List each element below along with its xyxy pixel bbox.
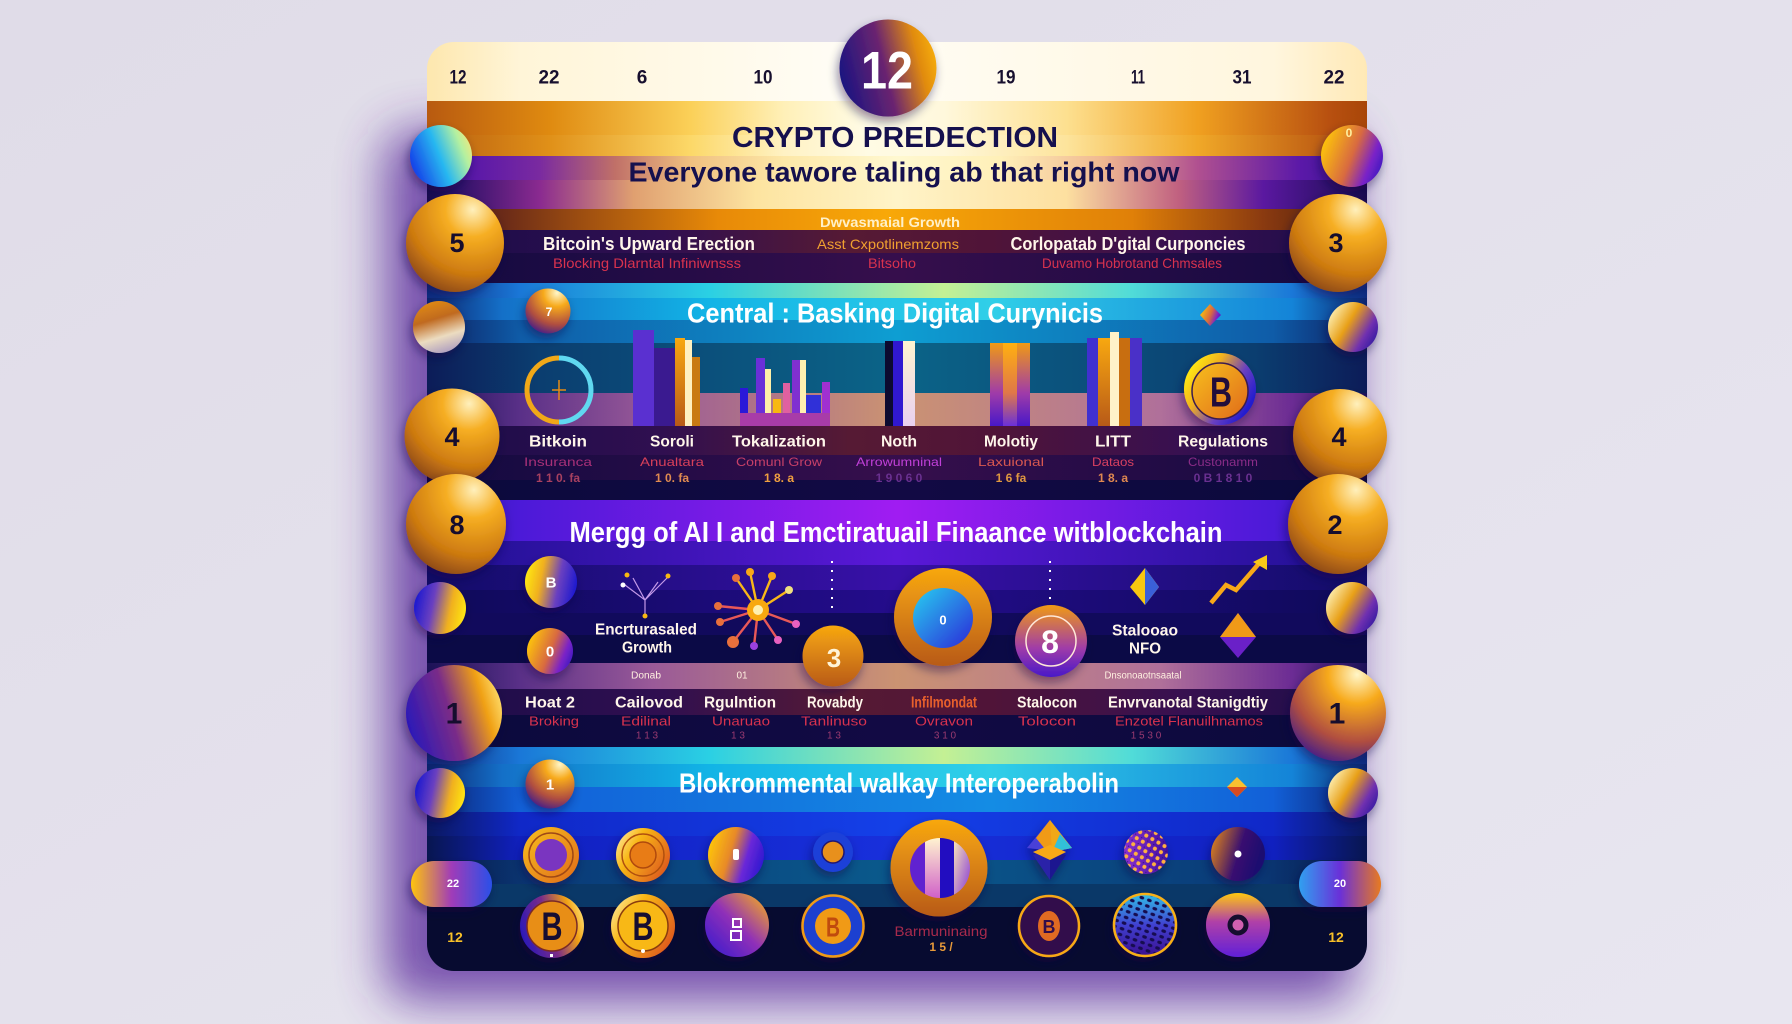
coin 3 bbox=[705, 893, 769, 957]
sphere 1 bbox=[406, 665, 502, 761]
sphere 5: 5 bbox=[449, 228, 465, 258]
labels row: AI section: Tolocon bbox=[1018, 714, 1076, 728]
sphere 2 bbox=[1288, 474, 1388, 574]
bitcoin coin 5 bbox=[1019, 896, 1079, 956]
icon: small diamond bbox=[1200, 304, 1221, 326]
top number row: 22 bbox=[538, 68, 560, 88]
labels row: central bank: Comunl Grow bbox=[736, 455, 822, 469]
labels row: central bank: 1 8. a bbox=[764, 471, 794, 485]
labels row: AI section: Dnsonoaotnsaatal bbox=[1104, 670, 1182, 682]
sphere 1: 1 bbox=[1329, 698, 1345, 730]
badge: B bbox=[525, 556, 577, 608]
sphere 4 bbox=[404, 388, 500, 484]
sphere row 3 bbox=[1328, 302, 1378, 352]
labels row: AI section: Ovravon bbox=[915, 714, 973, 728]
bitcoin coin 2: B bbox=[632, 905, 654, 949]
text: encentralized growth: Growth bbox=[622, 640, 672, 656]
text: stablecoin NFO bbox=[1112, 622, 1178, 658]
labels row: central bank bbox=[524, 434, 1268, 485]
summary text: Bitsoho bbox=[868, 255, 916, 271]
labels row: AI section: Enzotel Flanuilhnamos bbox=[1115, 714, 1264, 728]
badge: 7: 7 bbox=[546, 305, 553, 319]
pill left: 22 bbox=[447, 878, 459, 890]
labels row: central bank: Tokalization bbox=[732, 434, 826, 450]
dotted connector bbox=[831, 561, 833, 614]
labels row: central bank: 1 0. fa bbox=[655, 471, 689, 485]
labels row: central bank: Dataos bbox=[1092, 455, 1134, 469]
labels row: central bank: 1 9 0 6 0 bbox=[876, 471, 923, 485]
labels row: AI section: Envrvanotal Stanigdtiy bbox=[1108, 694, 1268, 712]
sphere row 6 bbox=[1326, 582, 1378, 634]
ring coin bbox=[1206, 893, 1270, 957]
labels row: AI section: Broking bbox=[529, 714, 579, 728]
sphere 8 bbox=[406, 474, 506, 574]
labels row: AI section: Unaruao bbox=[712, 714, 770, 728]
sphere 8: 8 bbox=[449, 510, 465, 540]
badge: 1 bbox=[526, 760, 574, 808]
sphere 1: 1 bbox=[446, 698, 462, 730]
sphere 5 bbox=[406, 194, 504, 292]
labels row: AI section: 1 3 bbox=[731, 730, 745, 742]
top number row: 11 bbox=[1131, 68, 1145, 88]
text: stablecoin NFO: NFO bbox=[1129, 640, 1161, 658]
icon: ethereum crystal bbox=[1027, 820, 1072, 880]
labels row: central bank: Insuranca bbox=[524, 455, 592, 469]
textured ball bbox=[1124, 830, 1168, 874]
badge: 8: 8 bbox=[1041, 624, 1059, 660]
top number row bbox=[450, 68, 1344, 88]
labels row: central bank: 1 6 fa bbox=[996, 471, 1027, 485]
pill left bbox=[411, 861, 492, 907]
summary text: Asst Cxpotlinemzoms bbox=[817, 236, 959, 252]
sphere row 8 bbox=[415, 768, 465, 818]
sphere 2: 2 bbox=[1327, 510, 1343, 540]
text: encentralized growth bbox=[595, 622, 697, 656]
dotted connector bbox=[1049, 561, 1051, 604]
labels row: central bank: 0 B 1 8 1 0 bbox=[1194, 471, 1253, 485]
icon: trend arrow bbox=[1211, 555, 1267, 603]
labels row: AI section: Tanlinuso bbox=[801, 714, 867, 728]
bitcoin coin 4: B bbox=[826, 912, 840, 942]
labels row: AI section: 1 1 3 bbox=[636, 730, 659, 742]
bar chart 3 bbox=[885, 341, 915, 426]
coin 3 bbox=[708, 827, 764, 883]
sphere 4: 4 bbox=[444, 422, 460, 452]
bottom numbers bbox=[447, 929, 1344, 945]
labels row: AI section: 1 5 3 0 bbox=[1131, 730, 1162, 742]
badge: 8 bbox=[1015, 605, 1087, 677]
labels row: AI section: Rgulntion bbox=[704, 694, 776, 712]
bar chart 5 bbox=[1087, 332, 1142, 426]
labels row: AI section bbox=[525, 670, 1268, 742]
summary text: Blocking Dlarntal Infiniwnsss bbox=[553, 255, 741, 271]
icon: progress ring bbox=[527, 358, 591, 422]
labels row: AI section: Edilinal bbox=[621, 714, 671, 728]
pill right bbox=[1299, 861, 1381, 907]
side spheres: left column bbox=[404, 125, 506, 907]
labels row: central bank: Custonamm bbox=[1188, 455, 1258, 469]
bar chart 1 bbox=[633, 330, 700, 426]
bitcoin coin 4 bbox=[802, 896, 864, 956]
badge: 3: 3 bbox=[827, 643, 841, 673]
section heading: AI and finance: Mergg of AI I and Emctiratuail Finaance witblockchain bbox=[570, 517, 1222, 549]
icon: small diamond bbox=[1227, 777, 1247, 797]
badge: B: B bbox=[546, 574, 557, 592]
coins: top row bbox=[523, 820, 1265, 916]
labels row: central bank: Arrowumninal bbox=[856, 455, 942, 469]
labels row: central bank: Soroli bbox=[650, 434, 694, 450]
title: CRYPTO PREDECTION bbox=[732, 122, 1058, 154]
panel: summary predictions bbox=[427, 209, 1367, 283]
panel: AI and decentralized finance bbox=[427, 500, 1367, 747]
sphere row 1 bbox=[410, 125, 472, 187]
sphere row 6 bbox=[414, 582, 466, 634]
top number row: 22 bbox=[1324, 68, 1344, 88]
badge: 1: 1 bbox=[546, 776, 554, 794]
bitcoin coin 1: B bbox=[542, 905, 562, 949]
text: stablecoin NFO: Stalooao bbox=[1112, 622, 1178, 640]
section heading: interoperability: Blokrommental walkay Interoperabolin bbox=[679, 768, 1119, 798]
icon: large ring coin bbox=[894, 568, 992, 666]
labels row: central bank: 1 1 0. fa bbox=[536, 471, 580, 485]
sphere row 1: 0 bbox=[1346, 126, 1353, 140]
labels row: AI section: Stalocon bbox=[1017, 694, 1077, 712]
icon: purple gem bbox=[1220, 613, 1256, 658]
icon: bitcoin coin bbox=[1174, 343, 1266, 435]
labels row: central bank: Laxuional bbox=[978, 455, 1044, 469]
summary text: Dwvasmaial Growth bbox=[820, 214, 960, 230]
labels row: central bank: Regulations bbox=[1178, 434, 1268, 450]
top number row: 12 bbox=[450, 68, 466, 88]
top number row: 31 bbox=[1232, 68, 1252, 88]
panel: central bank digital currencies bbox=[427, 283, 1367, 500]
sphere 3 bbox=[1289, 194, 1387, 292]
badge: 0 bbox=[527, 628, 573, 674]
caption: big coin: 1 5 / bbox=[929, 940, 953, 954]
panel shadow bbox=[384, 130, 1354, 1002]
labels row: AI section: Rovabdy bbox=[807, 694, 863, 712]
labels row: central bank: 1 8. a bbox=[1098, 471, 1128, 485]
coin 4 bbox=[813, 832, 853, 872]
labels row: central bank: LITT bbox=[1095, 434, 1131, 450]
coin 8 bbox=[1211, 827, 1265, 881]
labels row: central bank: Molotiy bbox=[984, 434, 1038, 450]
top number row: 19 bbox=[996, 68, 1016, 88]
badge: 0: 0 bbox=[546, 644, 554, 660]
badge: top 12 bbox=[840, 20, 936, 116]
badge: top 12: 12 bbox=[861, 42, 913, 100]
sphere 4: 4 bbox=[1331, 422, 1347, 452]
labels row: AI section: 1 3 bbox=[827, 730, 841, 742]
top number row: 6 bbox=[637, 68, 647, 88]
summary text: Duvamo Hobrotand Chmsales bbox=[1042, 255, 1222, 271]
labels row: central bank: Noth bbox=[881, 434, 917, 450]
badge: 7 bbox=[526, 288, 570, 334]
labels row: AI section: Cailovod bbox=[615, 694, 683, 712]
section heading: central bank: Central : Basking Digital Curynicis bbox=[687, 298, 1103, 328]
coin 1 bbox=[523, 827, 579, 883]
bitcoin coin 1 bbox=[520, 894, 584, 958]
bar chart 4 bbox=[990, 343, 1030, 426]
bottom numbers: 12 bbox=[1328, 929, 1344, 945]
summary text bbox=[543, 214, 1246, 271]
sphere 4 bbox=[1293, 389, 1387, 483]
labels row: central bank: Anualtara bbox=[640, 455, 704, 469]
large striped coin bbox=[890, 820, 988, 916]
caption: big coin bbox=[894, 923, 988, 954]
icon: sun network bbox=[714, 568, 800, 650]
bitcoin coin 2 bbox=[611, 894, 675, 958]
sphere row 8 bbox=[1328, 768, 1378, 818]
pill right: 20 bbox=[1334, 878, 1346, 890]
summary text: Corlopatab D'gital Curponcies bbox=[1010, 234, 1246, 254]
text: encentralized growth: Encrturasaled bbox=[595, 622, 697, 638]
icon: bitcoin coin: B bbox=[1210, 368, 1232, 416]
side spheres: right column bbox=[1288, 125, 1388, 907]
sphere 1 bbox=[1290, 665, 1386, 761]
bottom numbers: 12 bbox=[447, 929, 463, 945]
sphere row 3 bbox=[413, 301, 465, 353]
badge: 3 bbox=[802, 626, 864, 686]
subtitle: Everyone tawore taling ab that right now bbox=[628, 156, 1180, 188]
labels row: AI section: Donab bbox=[631, 670, 661, 682]
labels row: central bank: Bitkoin bbox=[529, 434, 587, 450]
sphere row 1 bbox=[1321, 125, 1383, 187]
bitcoin coin 5: B bbox=[1042, 917, 1056, 937]
coins: bottom row bbox=[520, 893, 1270, 958]
panel: interoperability bbox=[427, 747, 1367, 971]
top number row: 10 bbox=[754, 68, 772, 88]
coin 2 bbox=[616, 828, 670, 882]
textured coin bbox=[1114, 894, 1176, 956]
bar chart 2 bbox=[740, 358, 830, 426]
labels row: AI section: 3 1 0 bbox=[934, 730, 957, 742]
caption: big coin: Barmuninaing bbox=[894, 923, 988, 939]
sphere 3: 3 bbox=[1328, 228, 1344, 258]
icon: network tree bbox=[620, 572, 670, 618]
labels row: AI section: Infilmondat bbox=[911, 694, 978, 712]
icon: ethereum bbox=[1130, 568, 1159, 605]
panel: header bbox=[427, 42, 1367, 209]
labels row: AI section: Hoat 2 bbox=[525, 694, 575, 712]
icon: large ring coin: 0 bbox=[939, 612, 947, 628]
labels row: AI section: 01 bbox=[736, 670, 748, 682]
panel: infographic board bbox=[427, 42, 1367, 971]
summary text: Bitcoin's Upward Erection bbox=[543, 234, 755, 254]
